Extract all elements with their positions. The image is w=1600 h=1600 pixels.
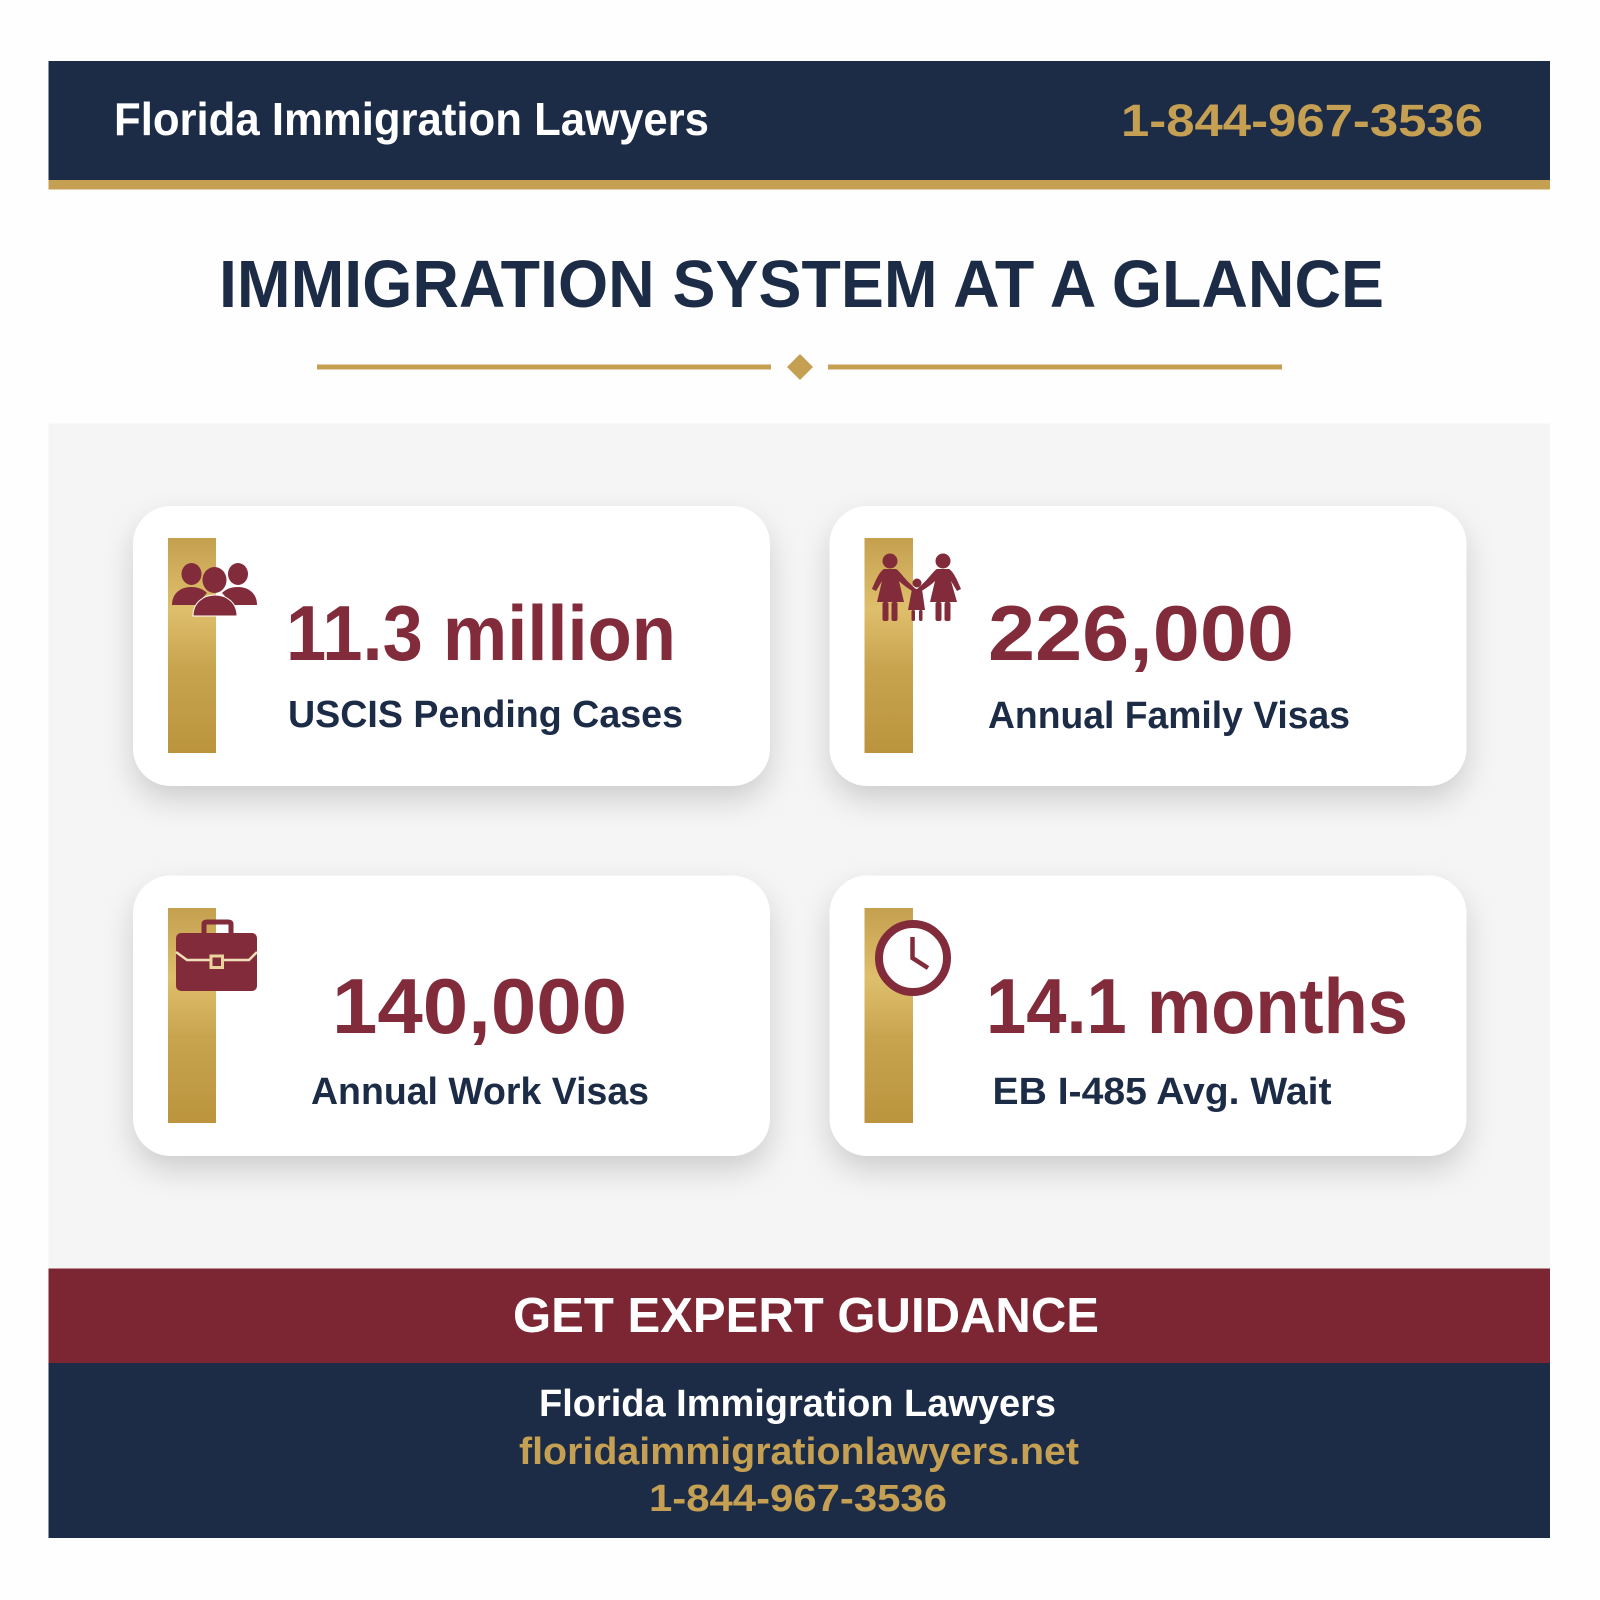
stat value: 14.1 months [986,962,1408,1050]
stat value: 226,000 [988,589,1294,677]
footer contact panel [48,1363,1550,1538]
card: annual work visas [133,876,770,1156]
card: annual family visas [830,506,1466,786]
call to action text: GET EXPERT GUIDANCE [513,1289,1099,1343]
header banner [48,61,1550,190]
header firm name: Florida Immigration Lawyers [114,93,709,145]
icon: family holding hands [872,554,961,621]
icon: briefcase [176,922,257,991]
icon: clock [879,924,947,992]
call to action banner [48,1268,1550,1364]
header phone number: 1-844-967-3536 [1121,95,1483,146]
card: EB I-485 average wait [830,876,1466,1156]
stat value: 140,000 [332,962,627,1050]
stat label: Annual Work Visas [311,1071,649,1113]
footer firm name: Florida Immigration Lawyers [539,1383,1056,1425]
stat label: EB I-485 Avg. Wait [992,1071,1332,1113]
stats panel [48,424,1550,1268]
stat value: 11.3 million [286,589,676,677]
stat label: USCIS Pending Cases [288,694,683,736]
title divider with diamond [317,354,1282,380]
footer phone number: 1-844-967-3536 [649,1478,947,1520]
card: USCIS pending cases [133,506,770,786]
icon: people group [172,563,257,616]
title: IMMIGRATION SYSTEM AT A GLANCE [219,247,1384,322]
footer website: floridaimmigrationlawyers.net [519,1431,1079,1473]
stat label: Annual Family Visas [988,695,1350,737]
